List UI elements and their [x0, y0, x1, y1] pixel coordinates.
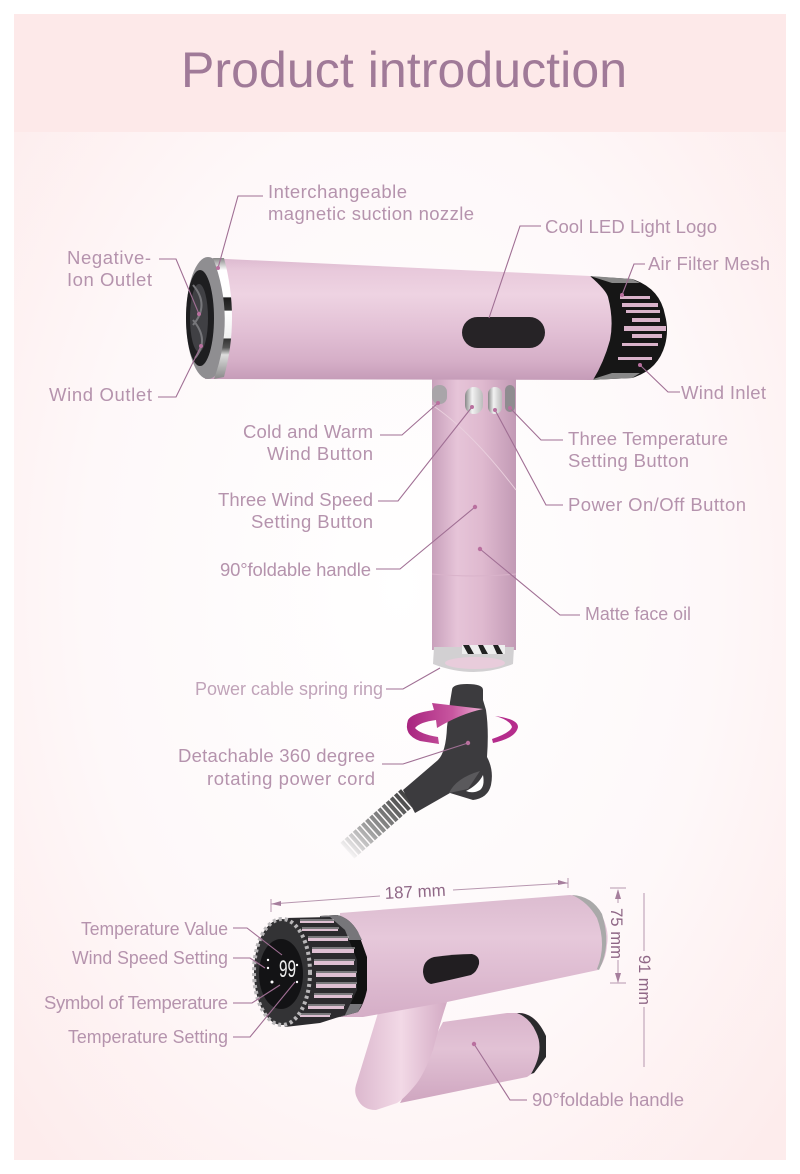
- buttons: [432, 385, 515, 414]
- labels: rear view: Temperature Value: [81, 918, 228, 939]
- grip: [355, 1002, 447, 1110]
- dimensions: 75 mm: [607, 908, 626, 959]
- labels: front view: Wind Outlet: [49, 384, 152, 405]
- handle: [432, 376, 516, 650]
- labels: rear view: Wind Speed Setting: [72, 947, 228, 968]
- labels: rear view: Temperature Setting: [68, 1026, 228, 1047]
- barrel: [205, 258, 612, 380]
- labels: front view: magnetic suction nozzle: [268, 203, 474, 224]
- title: Product introduction: [181, 42, 627, 98]
- labels: front view: Cold and Warm: [243, 421, 373, 442]
- labels: rear view: Symbol of Temperature: [44, 992, 228, 1013]
- icon: hair dryer front view: [186, 257, 667, 672]
- grille: [285, 917, 357, 1027]
- spring cable: [347, 797, 408, 851]
- plug body: [403, 684, 492, 813]
- labels: front view: Negative-: [67, 247, 151, 268]
- labels: rear view: 90°foldable handle: [532, 1089, 684, 1110]
- labels: front view: rotating power cord: [207, 768, 375, 789]
- labels: front view: Wind Inlet: [681, 382, 766, 403]
- labels: front view: Detachable 360 degree: [178, 745, 375, 766]
- LED logo: [462, 317, 545, 348]
- labels: front view: Ion Outlet: [67, 269, 152, 290]
- dimensions: 91 mm: [635, 955, 654, 1005]
- front nozzle: [186, 257, 232, 379]
- icon: detachable power cord: [347, 684, 518, 851]
- labels: front view: Power On/Off Button: [568, 494, 746, 515]
- barrel: [340, 895, 608, 1017]
- labels: rear view: [44, 918, 684, 1110]
- rotation arrow: [407, 703, 518, 744]
- labels: front view: Air Filter Mesh: [648, 253, 770, 274]
- labels: front view: Power cable spring ring: [195, 678, 383, 699]
- folded handle: [400, 1013, 545, 1103]
- labels: front view: Three Temperature: [568, 428, 728, 449]
- collar: [320, 915, 367, 1018]
- LED logo: [423, 954, 479, 984]
- labels: front view: 90°foldable handle: [220, 559, 371, 580]
- labels: front view: Setting Button: [568, 450, 689, 471]
- display dial: 99: [279, 956, 296, 983]
- labels: front view: Setting Button: [251, 511, 373, 532]
- air inlet grille: [585, 276, 667, 380]
- display dial: [254, 919, 310, 1025]
- callout lines and dots: [158, 196, 680, 1100]
- labels: front view: Cool LED Light Logo: [545, 216, 717, 237]
- labels: front view: Three Wind Speed: [218, 489, 373, 510]
- handle collar: [433, 645, 514, 672]
- labels: front view: Interchangeable: [268, 181, 407, 202]
- icon: hair dryer rear view with display: [254, 895, 608, 1110]
- dimensions: 187 mm: [384, 881, 446, 903]
- labels: front view: [49, 181, 770, 789]
- dimensions: [271, 878, 654, 1067]
- labels: front view: Matte face oil: [585, 603, 691, 624]
- labels: front view: Wind Button: [267, 443, 373, 464]
